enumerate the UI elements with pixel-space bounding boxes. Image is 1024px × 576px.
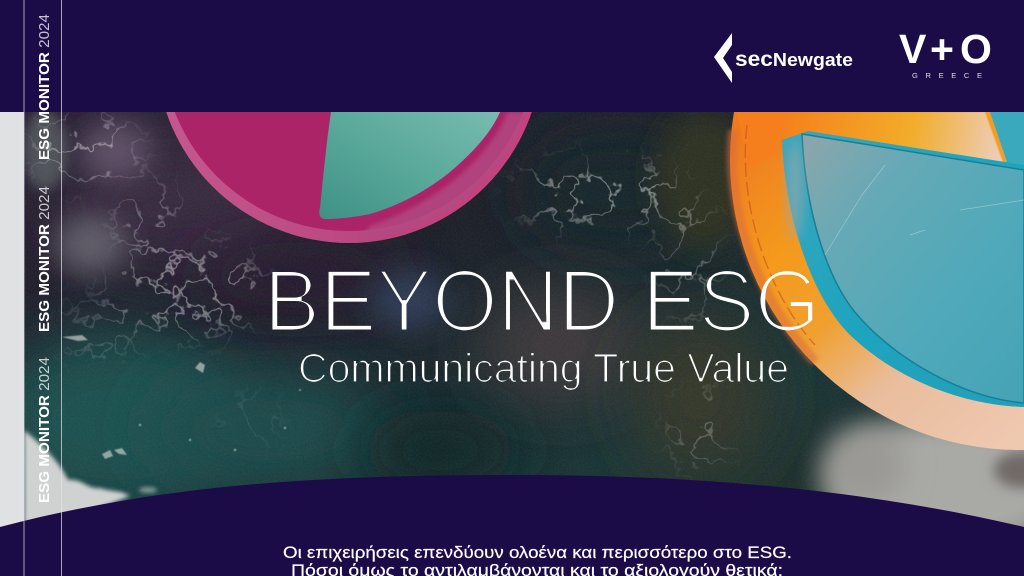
logo: SECNewgate: [714, 33, 853, 83]
grey side strip: [0, 112, 24, 532]
intro text: [283, 543, 792, 576]
repeated side label: [36, 14, 53, 503]
foam veins: [24, 112, 739, 480]
intro text: Οι επιχειρήσεις επενδύουν ολοένα και περισσότερο στο ESG.: [283, 543, 792, 562]
teal back wedge: [990, 112, 1024, 168]
sea foam clouds: [23, 110, 157, 525]
logo: SECNewgate: secNewgate: [735, 48, 853, 71]
label 2: ESG MONITOR 2024: [36, 186, 53, 332]
foam flecks: [62, 335, 301, 459]
vertical rules: [24, 0, 62, 576]
teal half disc edge: [782, 131, 1024, 407]
main title: BEYOND ESG: [264, 251, 820, 350]
logo: V+O Greece: GREECE: [912, 71, 982, 80]
icon: chevron: [714, 33, 732, 83]
subtitle: Communicating True Value: [298, 345, 789, 391]
cover photo: ocean with discs: [24, 112, 1024, 527]
orange disc: [724, 112, 1024, 450]
smoke cloud, bottom right: [825, 415, 1024, 555]
teal half disc face: [802, 134, 1024, 403]
magenta disc: [166, 112, 532, 243]
logo: V+O Greece: V+O: [899, 26, 992, 72]
ocean background: [24, 112, 916, 520]
mint wedge: [319, 112, 500, 219]
label 3: ESG MONITOR 2024: [36, 14, 53, 160]
navy curved footer: [0, 475, 1024, 576]
label 1: ESG MONITOR 2024: [36, 357, 53, 503]
